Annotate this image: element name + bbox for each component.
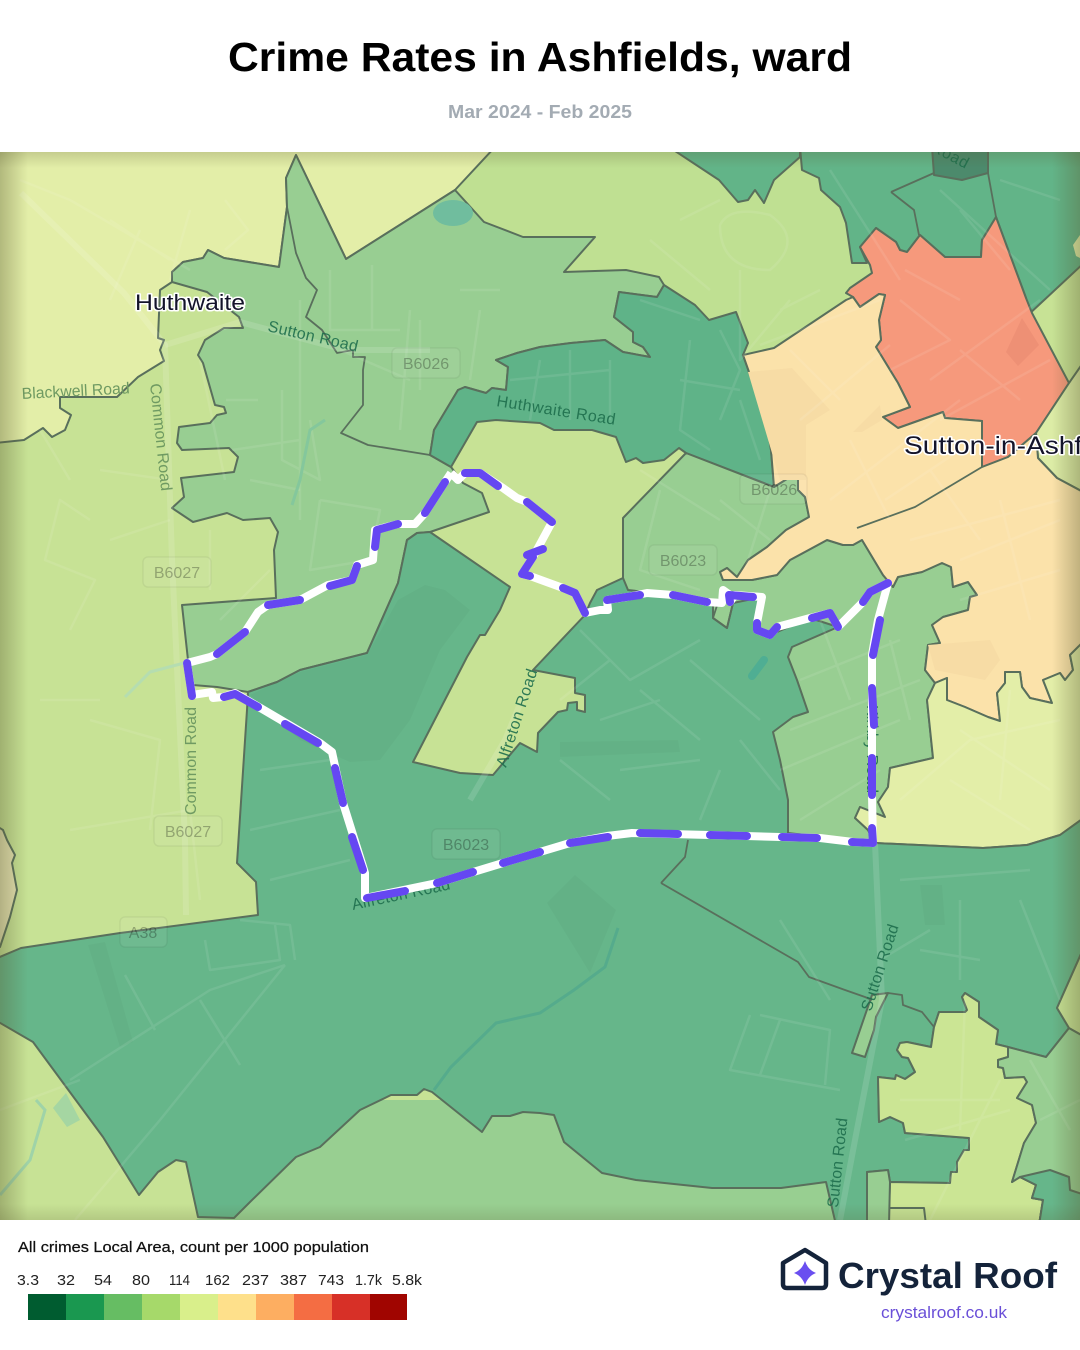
- shield B6027 lower: [154, 816, 222, 846]
- legend tick labels: 80: [132, 1272, 150, 1289]
- stream south-west: [0, 1100, 45, 1195]
- legend tick labels: 3.3: [17, 1272, 39, 1289]
- region: north light green: [455, 147, 872, 355]
- region: south green large: [0, 532, 1080, 1225]
- region: Sutton Road sliver: [852, 993, 888, 1057]
- road shields: [120, 348, 807, 947]
- brand logo: [783, 1250, 1058, 1322]
- subtitle: date range: Mar 2024 - Feb 2025: [448, 102, 632, 122]
- shield A38: [120, 917, 167, 947]
- shield B6026 east: [740, 474, 807, 504]
- region: top dark green north: [675, 152, 800, 204]
- label Kirkby Road: Kirkby Road: [863, 705, 880, 793]
- map base: light green areas: [0, 263, 1080, 1220]
- stream centre: [292, 420, 325, 505]
- shield B6026 north: B6026: [403, 356, 449, 373]
- icon: house with star: [783, 1250, 826, 1288]
- region: top right dark green: [800, 147, 1080, 316]
- region: right pale: [1036, 360, 1080, 493]
- region: salmon darker block: [1006, 318, 1039, 366]
- place label: Huthwaite: Huthwaite: [135, 290, 245, 315]
- region: salmon high crime: [846, 217, 1069, 467]
- legend tick labels: 32: [57, 1272, 75, 1289]
- legend tick labels: 1.7k: [355, 1272, 382, 1289]
- ponds south-west: [53, 1093, 80, 1127]
- region: east mid-green: [623, 453, 977, 843]
- region: Huthwaite north-west: [0, 147, 495, 443]
- region: right edge sliver: [1057, 945, 1080, 1037]
- road network: [0, 170, 1080, 1220]
- water: ponds and streams: [0, 200, 764, 1195]
- map edge fade: [0, 152, 1080, 1220]
- boundary purple dashes: [187, 473, 888, 898]
- label Huthwaite Road: Huthwaite Road: [495, 393, 617, 429]
- legend tick labels: [17, 1272, 423, 1289]
- label Common Road upper: Common Road: [146, 383, 174, 492]
- region: small pale blob right edge: [1073, 235, 1080, 258]
- ward boundary: Ashfields: [187, 473, 888, 898]
- region: right mid-green: [998, 1028, 1080, 1225]
- region: bottom-right green corner: [1020, 1170, 1080, 1225]
- region: central woodland shade: [250, 585, 470, 762]
- region: south woodland shade: [88, 740, 945, 1047]
- legend: [17, 1239, 423, 1320]
- legend tick labels: 54: [94, 1272, 112, 1289]
- region: south-east light patch: [878, 993, 1043, 1225]
- region: cream Sutton centre: [720, 294, 1080, 721]
- label Blackwell Road: Blackwell Road: [21, 380, 130, 403]
- label Sutton Road south: Sutton Road: [825, 1117, 851, 1208]
- region: dark patch top right: [932, 147, 988, 180]
- shield B6023 east: B6023: [660, 553, 706, 570]
- shield B6026 east: B6026: [751, 482, 797, 499]
- legend tick labels: 114: [169, 1272, 190, 1289]
- label Sutton Road north: Sutton Road: [266, 318, 360, 356]
- legend title: All crimes Local Area, count per 1000 population: [18, 1239, 369, 1256]
- legend tick labels: 162: [205, 1272, 230, 1289]
- region: bottom mid-green: [186, 1100, 836, 1225]
- pond east: [752, 660, 764, 676]
- brand url: crystalroof.co.uk: [881, 1303, 1008, 1322]
- region: Huthwaite east mid-green: [172, 155, 664, 692]
- shield A38: A38: [129, 925, 157, 942]
- shield B6027 upper: [143, 557, 211, 587]
- pond north: [433, 200, 473, 226]
- shield B6023 east: [649, 545, 717, 575]
- road labels: [21, 139, 971, 1208]
- legend colour scale: [28, 1294, 407, 1320]
- brand name: Crystal Roof: [838, 1255, 1058, 1296]
- shield B6027 upper: B6027: [154, 565, 200, 582]
- stream west: [125, 662, 188, 697]
- label Sutton Road east: Sutton Road: [859, 922, 903, 1013]
- label Road top right: Road: [928, 139, 971, 172]
- shield B6027 lower: B6027: [165, 824, 211, 841]
- label Alfreton Road south: Alfreton Road: [350, 876, 452, 914]
- legend tick labels: 237: [242, 1272, 269, 1289]
- region: far-left sliver: [0, 825, 17, 950]
- boundary white underlay: [187, 473, 888, 898]
- stream south: [434, 928, 618, 1090]
- legend tick labels: 387: [280, 1272, 307, 1289]
- label Alfreton Road east: Alfreton Road: [494, 667, 541, 769]
- legend tick labels: 5.8k: [392, 1272, 423, 1289]
- shield B6023 south: B6023: [443, 837, 489, 854]
- label Common Road lower: Common Road: [183, 707, 200, 815]
- legend tick labels: 743: [318, 1272, 344, 1289]
- region: bottom rectangle mid-green: [867, 1170, 890, 1225]
- title: Crime Rates in Ashfields, ward: [228, 34, 852, 80]
- region: cream inner blocks: [748, 372, 940, 648]
- internal boundaries: [287, 173, 996, 1027]
- shield B6026 north: [392, 348, 460, 378]
- region: Huthwaite Road dark green: [430, 285, 774, 487]
- shield B6023 south: [432, 829, 500, 859]
- region: south-east pale yellow: [855, 640, 1080, 848]
